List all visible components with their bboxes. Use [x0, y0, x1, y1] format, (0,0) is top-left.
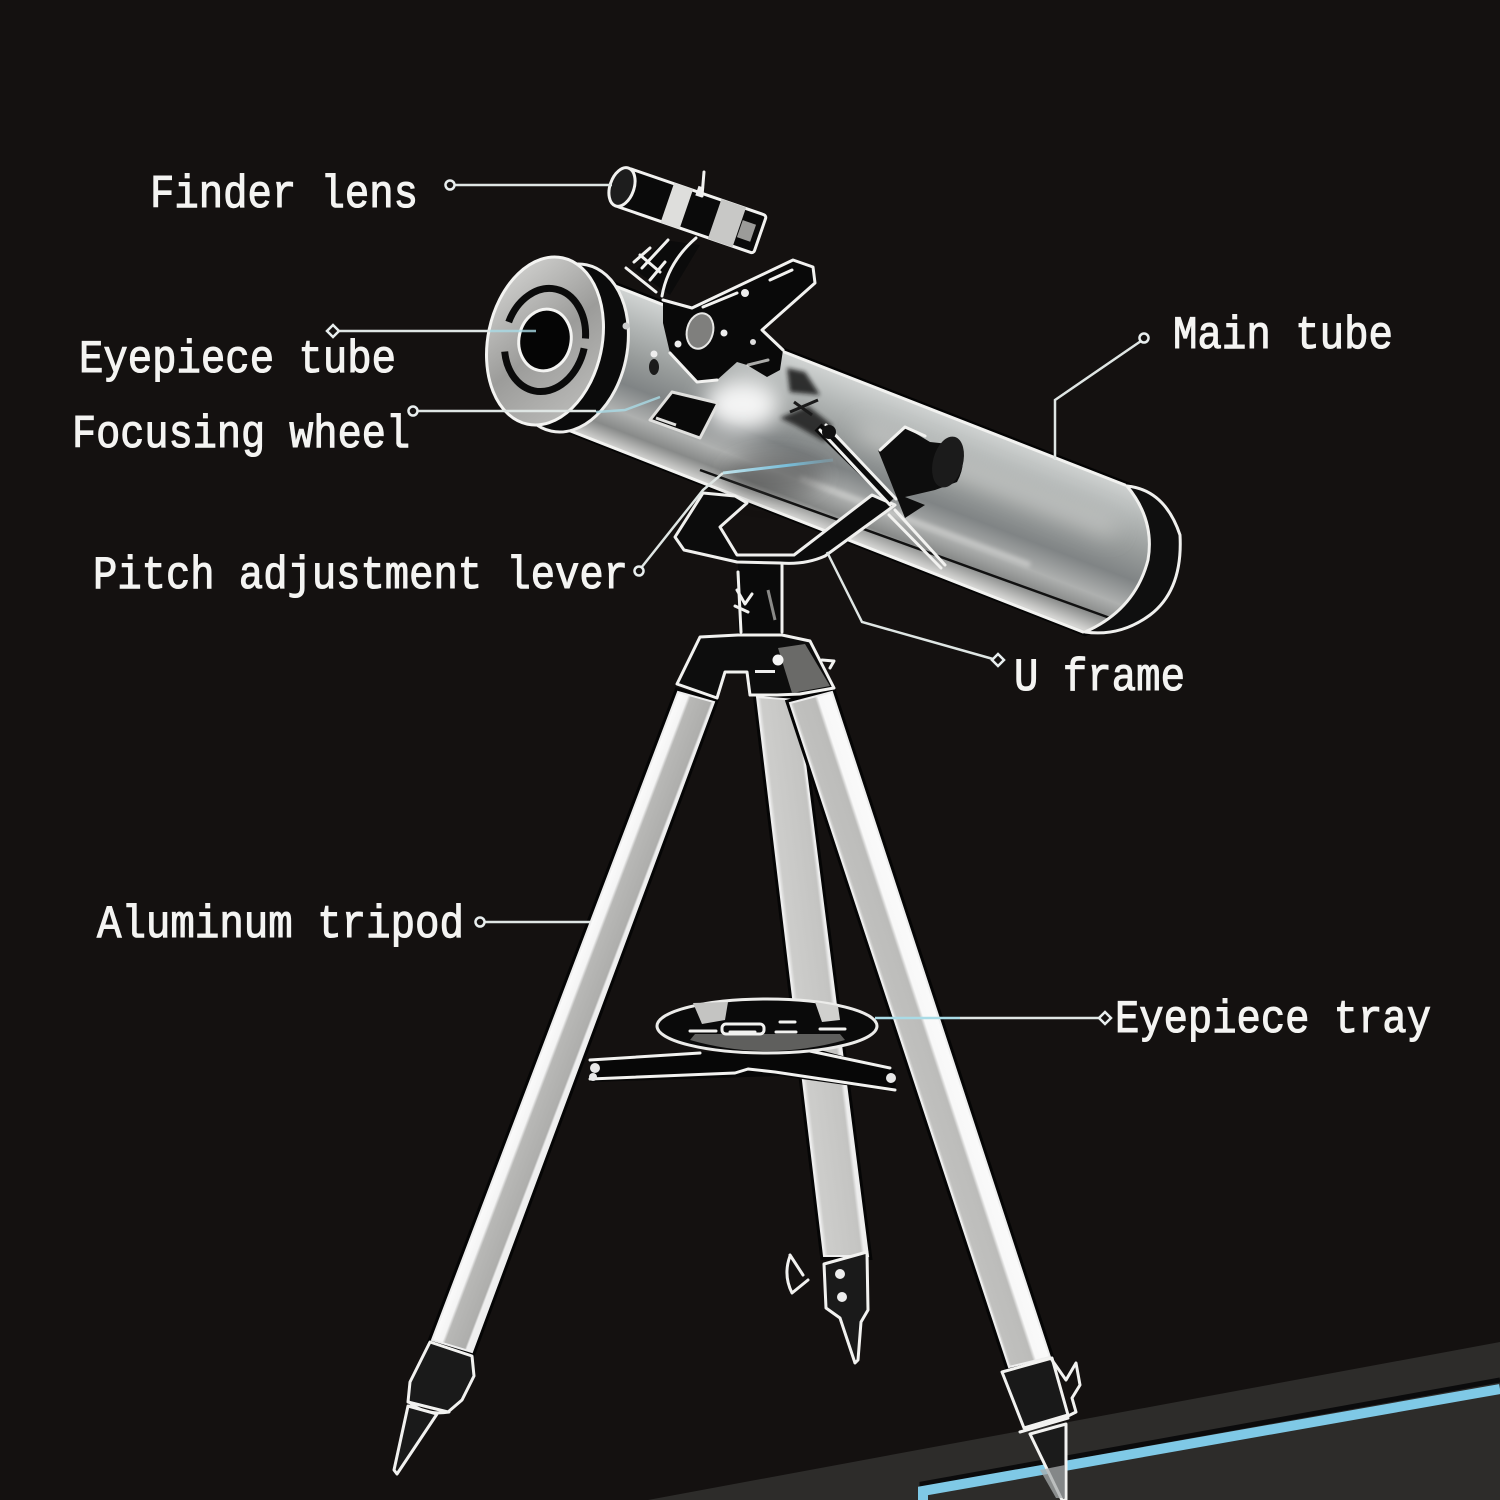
callout: focusing wheel: Focusing wheel: [72, 409, 410, 461]
callout: eyepiece tube: [79, 325, 536, 386]
main tube body: [568, 284, 1180, 633]
callout: focusing wheel: [72, 397, 660, 461]
right leg: [790, 692, 1080, 1500]
callout: main tube: Main tube: [1173, 310, 1393, 362]
callout: main tube: [1055, 310, 1393, 460]
callout: U frame: U frame: [1014, 652, 1185, 704]
rear cap: [1085, 486, 1180, 633]
front ring: [472, 246, 643, 443]
U frame: [675, 493, 895, 563]
callout: finder lens: [150, 169, 612, 221]
tripod: [394, 562, 1080, 1500]
finder thumb screw: [702, 172, 704, 196]
tube label plate: [650, 392, 718, 438]
left leg: [394, 692, 714, 1474]
callout: pitch adjustment lever: Pitch adjustment lever: [93, 550, 628, 602]
focuser: [649, 260, 815, 382]
finder scope: [604, 159, 769, 254]
callout: pitch adjustment lever: [93, 460, 833, 602]
middle leg: [757, 697, 868, 1363]
callout: finder lens: Finder lens: [150, 169, 418, 221]
callout: eyepiece tray: Eyepiece tray: [1115, 994, 1431, 1046]
callout: U frame: [827, 552, 1185, 704]
tripod head: [677, 562, 834, 698]
side knob: [878, 427, 969, 518]
callout: eyepiece tube: Eyepiece tube: [79, 334, 396, 386]
finder scope bracket: [626, 238, 700, 296]
floor band with blue line: [648, 1342, 1500, 1500]
telescope: [472, 159, 1180, 633]
eyepiece tray and braces: [589, 999, 896, 1092]
callout: eyepiece tray: [875, 994, 1431, 1046]
callout: aluminum tripod: Aluminum tripod: [97, 899, 464, 951]
pitch adjustment lever: [790, 400, 945, 568]
